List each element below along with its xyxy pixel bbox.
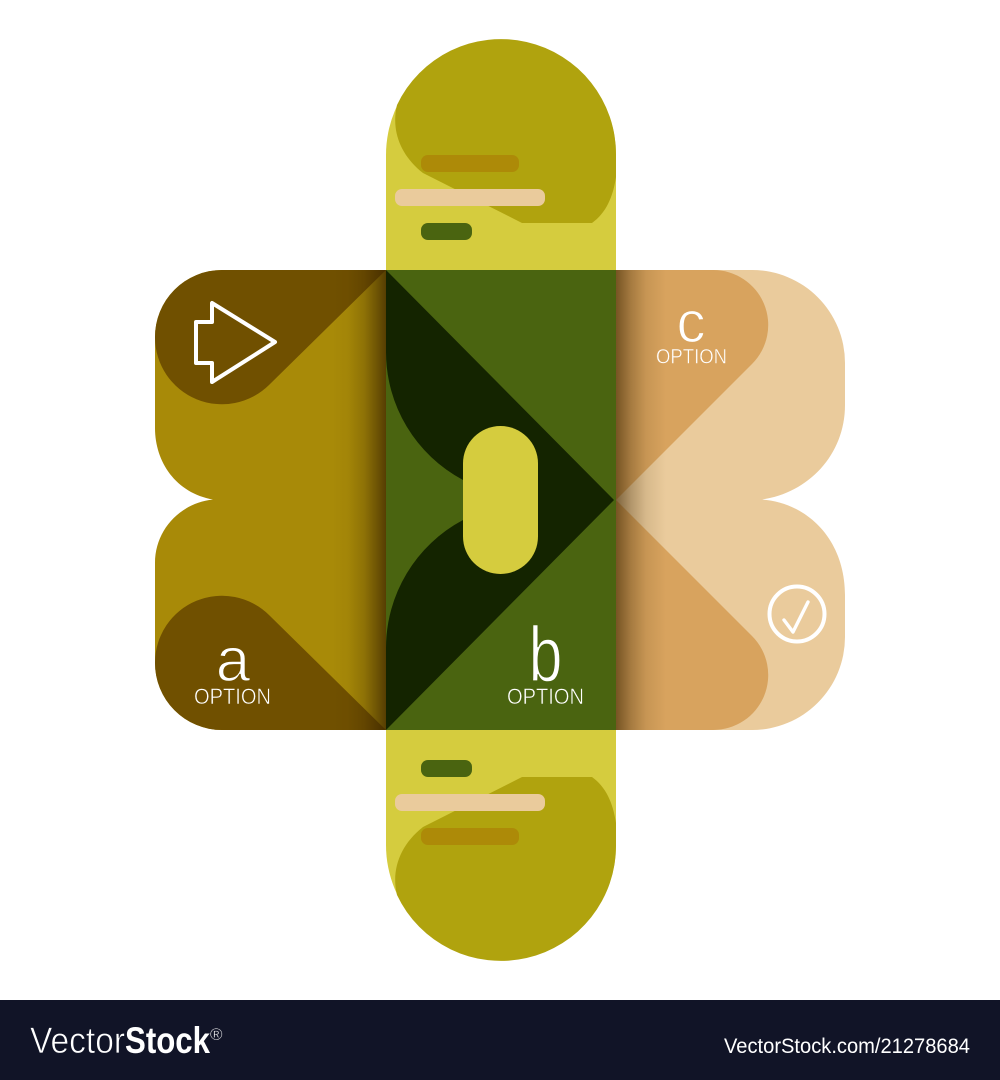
top tab bar: cream — [395, 189, 545, 206]
label: option c — [656, 290, 727, 368]
label: option c: OPTION — [656, 346, 727, 368]
label: option a — [194, 626, 271, 709]
label: option b — [507, 611, 584, 709]
label: option b: b — [529, 611, 562, 698]
label: option a: OPTION — [194, 684, 271, 709]
label: option c: c — [676, 290, 706, 355]
footer band — [0, 1000, 1000, 1080]
vertical yellow capsule — [386, 40, 616, 960]
panel: top tab — [395, 39, 616, 240]
bottom tab bar: green — [421, 760, 472, 777]
label: option b: OPTION — [507, 684, 584, 709]
footer logo: Stock — [125, 1020, 210, 1061]
top tab bar: ochre — [421, 155, 519, 172]
right bottom dark shape — [616, 500, 768, 730]
panel: right option c — [616, 270, 845, 730]
label: option a: a — [216, 626, 251, 695]
right panel body — [616, 270, 845, 730]
panel: left option a — [155, 270, 386, 730]
left top dark corner — [155, 270, 386, 404]
panel: bottom tab — [395, 760, 616, 961]
centre yellow pill — [463, 426, 538, 574]
footer image id: VectorStock.com/21278684 — [724, 1035, 970, 1058]
bottom tab bar: cream — [395, 794, 545, 811]
bottom tab bar: ochre — [421, 828, 519, 845]
panel: centre green square — [386, 270, 616, 730]
dark triangle with curved cutouts — [386, 270, 614, 730]
footer logo: Vector — [30, 1020, 125, 1061]
icon: check mark in circle — [770, 586, 824, 642]
centre square — [386, 270, 616, 730]
footer logo: ® — [210, 1025, 223, 1044]
right panel fold shadow — [616, 270, 666, 730]
bottom tab dark shape — [395, 777, 616, 961]
right top dark shape — [616, 270, 768, 500]
top tab dark shape — [395, 39, 616, 223]
left panel fold shadow — [332, 270, 386, 730]
footer logo — [30, 1020, 223, 1061]
icon: outlined arrow — [196, 303, 275, 382]
left bottom dark corner — [155, 596, 386, 730]
top tab bar: green — [421, 223, 472, 240]
left panel body — [155, 270, 386, 730]
